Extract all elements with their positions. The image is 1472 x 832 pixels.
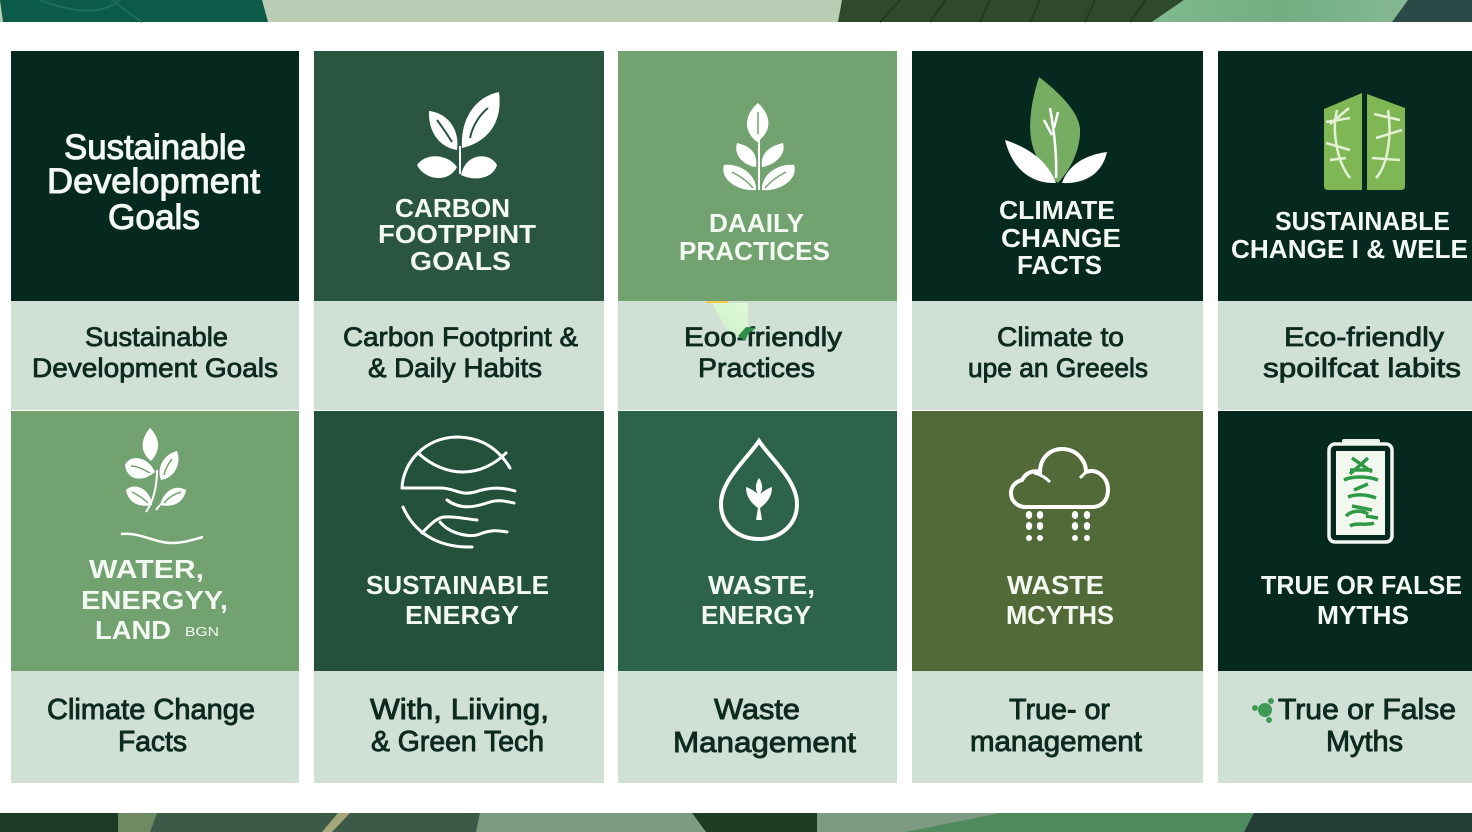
panel: Sustainable Energy — [314, 411, 604, 783]
heading: Climate Change Facts — [999, 195, 1121, 280]
heading: Daily Practices: PRACTICES — [679, 236, 830, 266]
caption — [912, 301, 1203, 410]
icon: green speck — [1252, 698, 1274, 723]
caption: & Green Tech — [371, 726, 544, 758]
heading: Water, Energy, Land: LAND — [95, 615, 171, 645]
heading: Sustainable Development Goals: Sustainable — [64, 128, 246, 167]
caption: Sustainable — [85, 322, 228, 352]
caption: Management — [673, 727, 856, 759]
heading: Sustainable Energy: ENERGY — [405, 600, 519, 630]
panel: Sustainable Change & Well — [1218, 51, 1472, 410]
panel: Daily Practices — [618, 51, 897, 410]
heading: Carbon Footprint Goals: CARBON — [395, 193, 510, 223]
panel: Water, Energy, Land — [11, 411, 299, 783]
caption — [618, 671, 897, 783]
caption — [11, 301, 299, 410]
heading: True or False Myths: MYTHS — [1317, 600, 1409, 630]
caption: Carbon Footprint & — [343, 322, 578, 352]
panel: True or False Myths — [1218, 411, 1472, 783]
top decorative leaf strip — [0, 0, 1472, 22]
caption — [912, 671, 1203, 783]
icon: water drop — [721, 441, 797, 539]
caption: & Daily Habits — [368, 353, 542, 383]
icon: three leaves — [1005, 77, 1107, 183]
caption — [1218, 671, 1472, 783]
caption: Eco-friendly — [1284, 322, 1445, 352]
caption — [11, 671, 299, 783]
heading: Sustainable Change & Well: CHANGE I & WELE — [1231, 234, 1468, 264]
caption: management — [970, 726, 1142, 758]
heading: Water, Energy, Land: BGN — [185, 624, 219, 639]
heading: Waste Myths — [1006, 570, 1114, 630]
heading: Water, Energy, Land: WATER, — [89, 554, 204, 584]
icon: plant with ground line — [121, 428, 203, 543]
heading: Waste, Energy — [701, 570, 815, 630]
heading: Daily Practices — [679, 208, 830, 266]
heading: Carbon Footprint Goals: FOOTPPINT — [378, 219, 536, 249]
heading: Climate Change Facts: CHANGE — [1001, 223, 1121, 253]
caption: Climate Change — [47, 694, 255, 726]
caption: Myths — [1326, 726, 1403, 758]
panel: Climate Change Facts — [912, 51, 1203, 410]
heading: Sustainable Change & Well — [1231, 206, 1468, 264]
icon: sprout — [417, 92, 500, 178]
icon: plant — [723, 103, 795, 190]
heading: Sustainable Energy — [366, 570, 549, 630]
caption: True- or — [1009, 694, 1110, 726]
panel: Sustainable Development Goals — [11, 51, 299, 410]
caption: Facts — [118, 726, 187, 758]
caption — [314, 301, 604, 410]
heading: Carbon Footprint Goals: GOALS — [410, 246, 511, 276]
heading: Climate Change Facts: FACTS — [1017, 250, 1102, 280]
panel: Waste, Energy — [618, 411, 897, 783]
icon: rain cloud — [1011, 449, 1108, 541]
caption: Development Goals — [32, 353, 278, 383]
heading: Sustainable Change & Well: SUSTAINABLE — [1275, 206, 1450, 236]
icon: battery with plant — [1329, 439, 1392, 542]
caption — [314, 671, 604, 783]
heading: Water, Energy, Land — [81, 554, 228, 645]
caption: Eoo-friendly — [684, 322, 843, 352]
caption — [618, 301, 897, 410]
panel: Waste Myths — [912, 411, 1203, 783]
caption: Climate to — [997, 322, 1124, 352]
caption: Practices — [698, 353, 815, 383]
heading: Waste, Energy: WASTE, — [708, 570, 815, 600]
heading: Sustainable Energy: SUSTAINABLE — [366, 570, 549, 600]
caption: With, Liiving, — [370, 694, 549, 726]
heading: Daily Practices: DAAILY — [709, 208, 804, 238]
caption: True or False — [1278, 694, 1456, 726]
heading: Climate Change Facts: CLIMATE — [999, 195, 1115, 225]
heading: Sustainable Development Goals — [47, 128, 260, 237]
heading: True or False Myths — [1261, 570, 1462, 630]
heading: Waste Myths: MCYTHS — [1006, 600, 1114, 630]
heading: Sustainable Development Goals: Development — [47, 162, 260, 201]
heading: Sustainable Development Goals: Goals — [108, 198, 200, 237]
panel: Carbon Footprint Goals — [314, 51, 604, 410]
heading: Carbon Footprint Goals — [378, 193, 536, 276]
icon: green book — [1324, 93, 1405, 190]
heading: True or False Myths: TRUE OR FALSE — [1261, 570, 1462, 600]
caption — [1218, 301, 1472, 410]
heading: Waste, Energy: ENERGY — [701, 600, 811, 630]
heading: Water, Energy, Land: ENERGYY, — [81, 585, 228, 615]
caption: spoilfcat labits — [1263, 353, 1461, 383]
caption: Waste — [714, 694, 800, 726]
bottom decorative leaf strip — [0, 813, 1472, 832]
caption: upe an Greeels — [968, 353, 1148, 383]
heading: Waste Myths: WASTE — [1007, 570, 1104, 600]
icon: globe with waves — [402, 437, 515, 547]
